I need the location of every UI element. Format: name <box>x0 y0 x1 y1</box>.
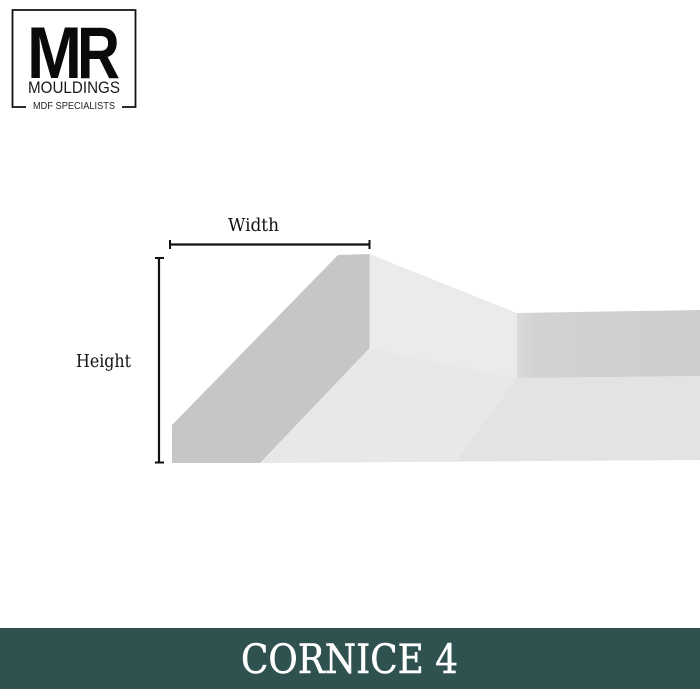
height dimension line <box>155 258 164 463</box>
logo letter M: M <box>27 13 82 94</box>
lower face mitre section <box>260 348 517 463</box>
lower face right section <box>260 348 700 463</box>
upper angled face <box>369 254 517 378</box>
cornice profile illustration <box>172 254 700 463</box>
logo <box>12 10 136 112</box>
width dimension line <box>170 240 370 249</box>
cut end face <box>172 254 370 463</box>
title: CORNICE 4 <box>241 637 458 683</box>
title band <box>0 628 700 689</box>
height label: Height <box>76 352 131 372</box>
logo word MOULDINGS: MOULDINGS <box>28 79 120 97</box>
logo letter R: R <box>77 13 120 94</box>
logo tagline: MDF SPECIALISTS <box>33 101 115 112</box>
width label: Width <box>228 216 279 236</box>
logo frame <box>12 10 136 107</box>
recessed run face <box>517 310 700 378</box>
